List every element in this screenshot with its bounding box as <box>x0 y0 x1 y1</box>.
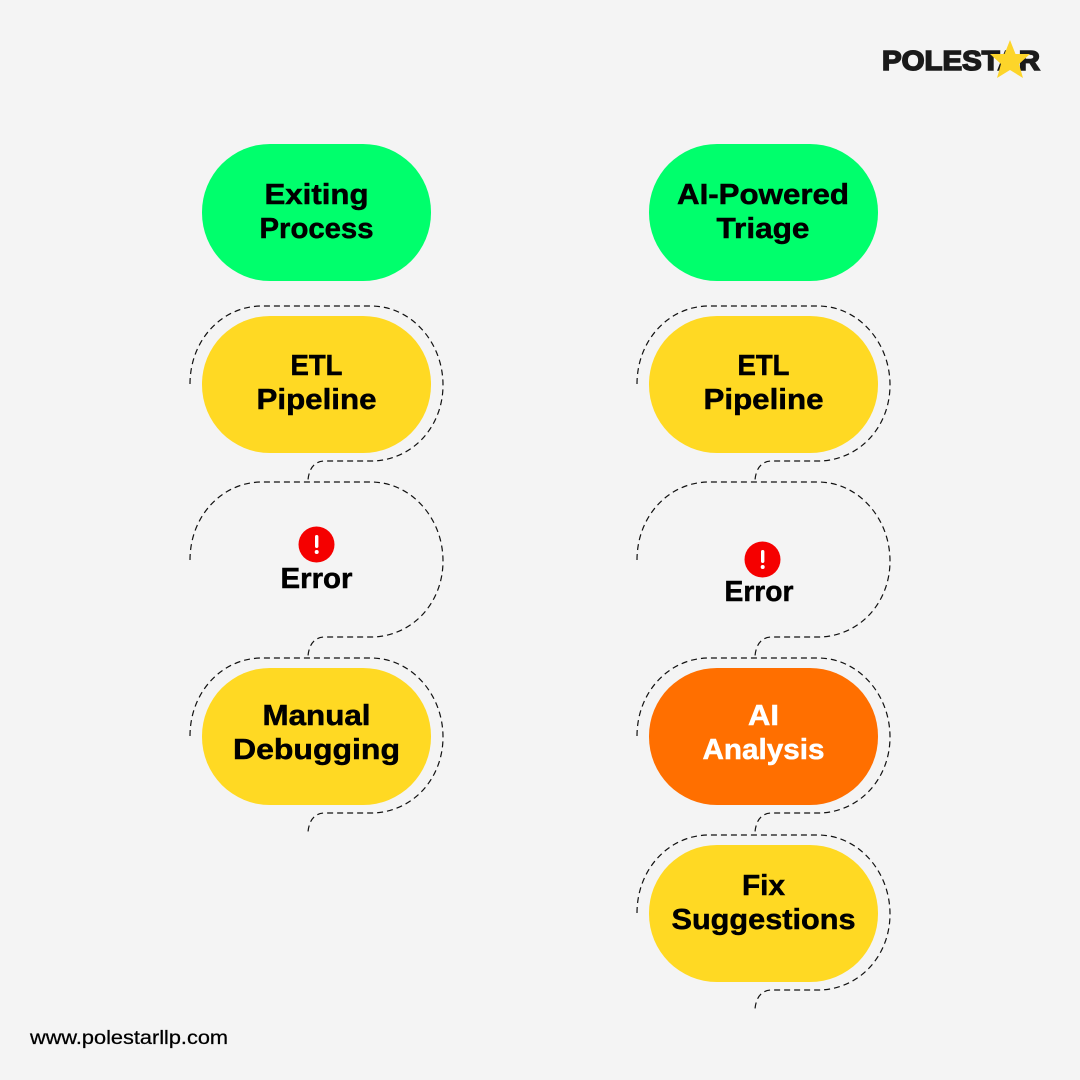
connector: around ETL Pipeline <box>190 306 443 480</box>
pill: ETL Pipeline <box>202 316 431 453</box>
icon: error alert <box>298 526 334 562</box>
label: Error: Error <box>280 563 352 595</box>
pill: Exiting Process: Exiting <box>264 179 368 211</box>
pill: Exiting Process <box>202 144 431 281</box>
pill: ETL Pipeline <box>649 316 878 453</box>
pill: AI Analysis <box>649 668 878 805</box>
pill: AI-Powered Triage <box>649 144 878 281</box>
connector: around Error <box>637 482 890 656</box>
connector: around AI Analysis <box>637 658 890 832</box>
icon: error alert <box>744 542 780 578</box>
pill: ETL Pipeline: ETL <box>290 350 342 382</box>
logo: Polestar: POLESTAR <box>882 45 1040 76</box>
pill: ETL Pipeline: Pipeline <box>704 384 824 416</box>
pill: ETL Pipeline: Pipeline <box>256 384 376 416</box>
pill: Fix Suggestions <box>649 845 878 982</box>
pill: AI-Powered Triage: AI-Powered <box>677 179 849 211</box>
connector: around Error <box>190 482 443 656</box>
pill: AI Analysis: AI <box>748 700 779 732</box>
pill: Exiting Process: Process <box>260 213 374 245</box>
column: existing process <box>190 144 443 832</box>
pill: AI Analysis: Analysis <box>702 734 824 766</box>
pill: Manual Debugging <box>202 668 431 805</box>
connector: around Fix Suggestions <box>637 835 890 1009</box>
pill: Fix Suggestions: Fix <box>742 870 785 902</box>
website url: www.polestarllp.com <box>29 1028 228 1049</box>
connector: around Manual Debugging <box>190 658 443 832</box>
column: AI-powered triage <box>637 144 890 1009</box>
pill: Manual Debugging: Manual <box>262 700 370 732</box>
pill: AI-Powered Triage: Triage <box>716 213 810 245</box>
pill: ETL Pipeline: ETL <box>738 350 790 382</box>
label: Error: Error <box>724 576 794 608</box>
pill: Fix Suggestions: Suggestions <box>672 904 856 936</box>
pill: Manual Debugging: Debugging <box>233 734 400 766</box>
connector: around ETL Pipeline <box>637 306 890 480</box>
